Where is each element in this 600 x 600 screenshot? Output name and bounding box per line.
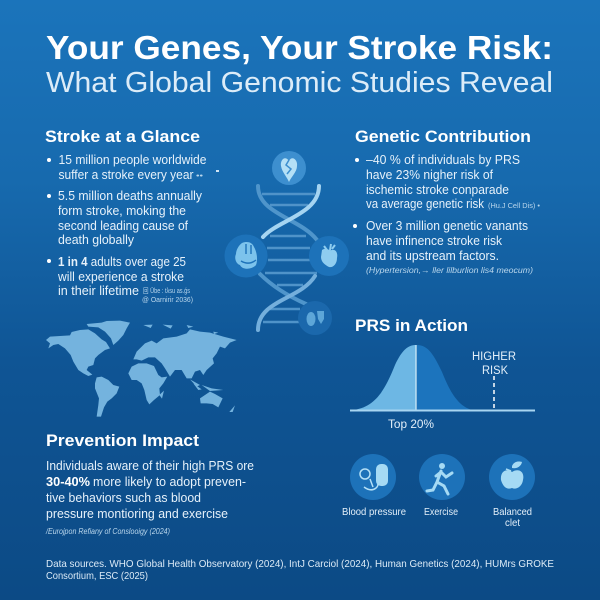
heading: genetic contribution: Genetic Contribution [355,127,531,146]
bullet: genetic variants [353,218,533,275]
bullet: annual strokes [47,152,206,182]
icon: kidneys [298,301,332,335]
bullet: annual deaths [47,188,203,247]
bullet: genetic variants: have infinence stroke risk [366,233,503,248]
prevention icons row [342,454,535,529]
bullet: PRS risk [355,152,541,211]
icon: broken heart [272,151,306,185]
bullet: lifetime risk: in their lifetime [58,283,139,298]
citation: /Eurojpon Refiany of Conslooigy (2024) [45,527,170,536]
bullet: annual deaths: second leading cause of [58,218,188,233]
body text: tive behaviors such as blood [46,490,201,505]
icon: balanced diet: Balanced [493,506,532,518]
icon: heart [309,236,349,276]
data sources [46,558,554,582]
dna front strands [258,186,319,330]
world map [46,321,237,417]
bullet: genetic variants: and its upstream factors. [366,248,499,263]
label: higher risk: RISK [482,365,508,377]
bullet: annual deaths: 5.5 million deaths annually [58,188,203,203]
DNA helix with organ icons [224,151,349,335]
icon: exercise: Exercise [424,506,458,518]
bullet: genetic variants: Over 3 million genetic vanants [366,218,528,233]
icon: exercise [419,454,465,518]
data sources: Consortium, ESC (2025) [46,570,148,582]
bullet: lifetime risk: 1 in 4 adults over age 25 [58,254,186,269]
icon: brain [224,234,268,278]
bullet: lifetime risk: @ Oarnirir 2036) [142,297,193,304]
body text: pressure montioring and exercise [46,506,228,521]
bullet: lifetime risk: 回 Ūbe : tλsu as.ǵs [143,287,190,295]
panel: PRS in action [350,316,535,431]
label: higher risk [472,351,516,377]
bullet: annual deaths: form stroke, moking the [58,203,186,218]
body text [46,458,254,521]
bullet: PRS risk: have 23% nigher risk of [366,167,493,182]
bullet: PRS risk: –40 % of individuals by PRS [366,152,520,167]
bell curve chart [350,345,535,431]
bullet: annual strokes: •• [196,173,204,180]
body text: more likely to adopt preven- [93,474,246,489]
bullet: genetic variants: (Hypertersion,→ ller lilburlion lis4 meocum) [366,266,533,275]
bullet: PRS risk: va average genetic risk [366,196,485,211]
body text: 30-40% [46,474,91,489]
heading: prevention impact: Prevention Impact [46,431,199,450]
icon: blood pressure [342,454,406,518]
data sources: Data sources. WHO Global Health Observatory (2024), IntJ Carciol (2024), Human Genetics (2024), HUMrs GROKE [46,558,554,570]
bullet: annual strokes: 15 million people worldwide [58,152,206,167]
panel: stroke at a glance [45,127,206,304]
panel: prevention impact [45,431,254,536]
label: top 20%: Top 20% [388,419,434,431]
dna back strands [258,186,317,304]
bullet: annual deaths: death globally [58,232,135,247]
dna rungs [262,194,317,322]
heading: PRS in action: PRS in Action [355,316,468,335]
bullet: annual strokes: suffer a stroke every year [58,167,194,182]
heading: stroke at a glance: Stroke at a Glance [45,127,200,146]
title [46,29,553,99]
label: higher risk: HIGHER [472,351,516,363]
bullet: lifetime risk: will experience a stroke [57,269,184,284]
icon: balanced diet [489,454,535,529]
body text: Individuals aware of their high PRS ore [46,458,254,473]
icon: blood pressure: Blood pressure [342,506,406,518]
panel: genetic contribution [353,127,541,275]
bullet: PRS risk: ischemic stroke conparade [366,182,509,197]
bullet: PRS risk: (Hu.J Cell Dis) • [488,203,541,210]
icon: balanced diet: clet [505,517,520,529]
bullet: lifetime risk [47,254,193,304]
title: What Global Genomic Studies Reveal [46,67,553,99]
decorative dot [216,170,219,172]
title: Your Genes, Your Stroke Risk: [46,29,553,66]
